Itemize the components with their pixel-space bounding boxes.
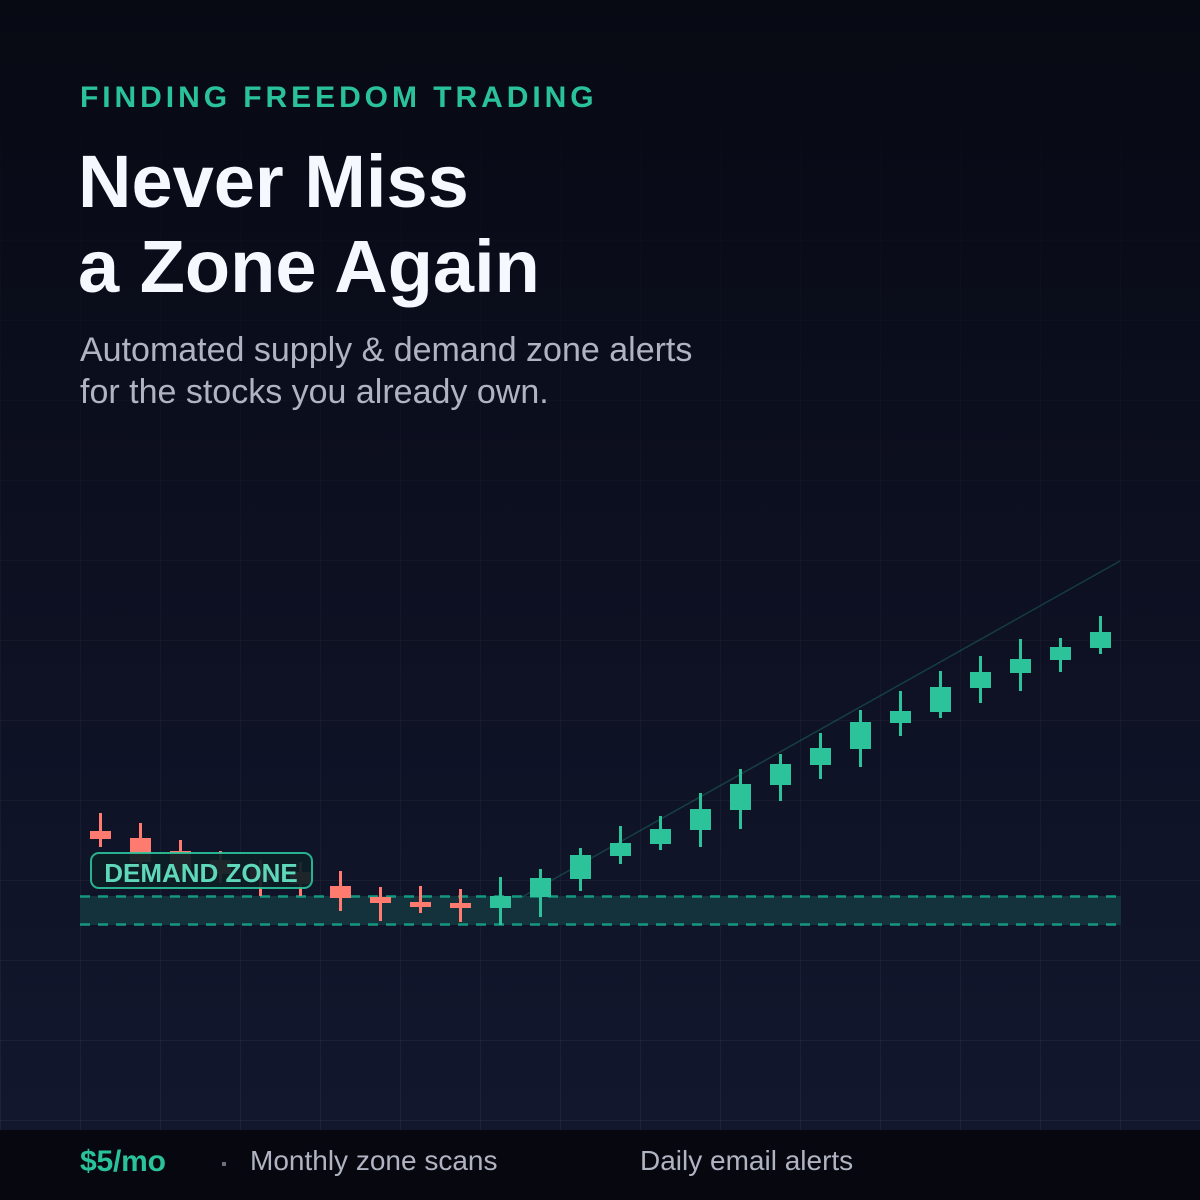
subtitle: Automated supply & demand zone alerts [80,331,692,369]
title [78,140,540,308]
feature: daily alerts: Daily email alerts [640,1145,853,1176]
trend line [522,561,1120,897]
title: a Zone Again [78,225,540,308]
feature: monthly scans: Monthly zone scans [250,1145,497,1176]
subtitle: for the stocks you already own. [80,373,549,411]
price: $5/mo [80,1145,166,1178]
title: Never Miss [78,140,469,223]
red candles [90,813,471,922]
subtitle [80,331,692,411]
green candles [490,616,1111,925]
separator dot [222,1162,226,1166]
eyebrow heading: FINDING FREEDOM TRADING [80,81,598,114]
demand zone label: DEMAND ZONE [104,858,298,888]
footer bar [0,1130,1200,1200]
demand zone band [80,896,1121,925]
